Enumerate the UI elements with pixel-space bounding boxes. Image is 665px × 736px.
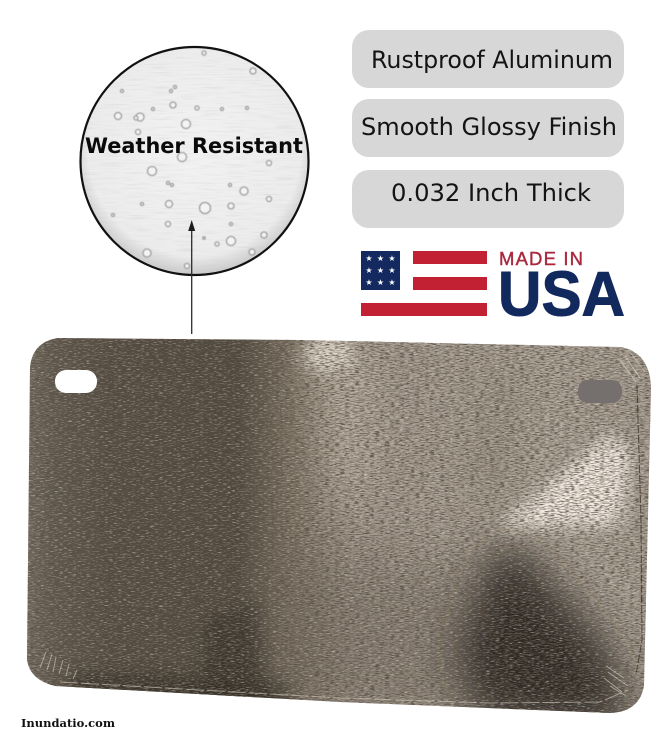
flag canton: ★: [388, 278, 396, 287]
feature pill: rustproof aluminum: [352, 30, 624, 88]
USA text: USA: [498, 260, 625, 330]
aluminum plate: [20, 330, 660, 730]
feature pill: smooth glossy finish: Smooth Glossy Finish: [361, 113, 617, 141]
feature pill: thickness: 0.032 Inch Thick: [391, 179, 591, 207]
made in USA logo: [361, 248, 625, 330]
plate edge seam: [636, 385, 642, 675]
flag stripes: [361, 251, 487, 316]
feature pill: smooth glossy finish: [352, 99, 624, 157]
flag canton: [361, 251, 400, 290]
inset circle: water droplets on aluminum: [80, 47, 310, 275]
feature pill: thickness: [352, 170, 624, 228]
mounting hole right: [578, 380, 622, 403]
top centre highlight: [302, 337, 354, 373]
flag canton: ★: [365, 266, 373, 275]
mid-right shade: [472, 376, 521, 494]
brushed texture: [20, 330, 660, 720]
glare patch right: [498, 432, 632, 528]
arrow from plate to circle: [188, 220, 195, 334]
lower centre dimming: [290, 547, 484, 708]
mounting hole left: [55, 370, 97, 393]
dark lower band: [205, 600, 268, 715]
flag canton: ★: [388, 266, 396, 275]
made in text: MADE IN: [499, 248, 583, 269]
water droplets: [112, 51, 272, 268]
weather resistant label: Weather Resistant: [85, 134, 303, 158]
footer site name: Inundatio.com: [21, 716, 115, 730]
flag canton: ★: [365, 254, 373, 263]
flag canton: ★: [388, 254, 396, 263]
flag canton: ★: [377, 278, 384, 287]
feature pill: rustproof aluminum: Rustproof Aluminum: [371, 46, 613, 74]
flag canton: ★: [377, 254, 384, 263]
dark right diagonal shadow: [455, 545, 630, 730]
flag canton: ★: [377, 266, 384, 275]
corner scratches: [40, 352, 645, 696]
flag canton: ★: [365, 278, 373, 287]
